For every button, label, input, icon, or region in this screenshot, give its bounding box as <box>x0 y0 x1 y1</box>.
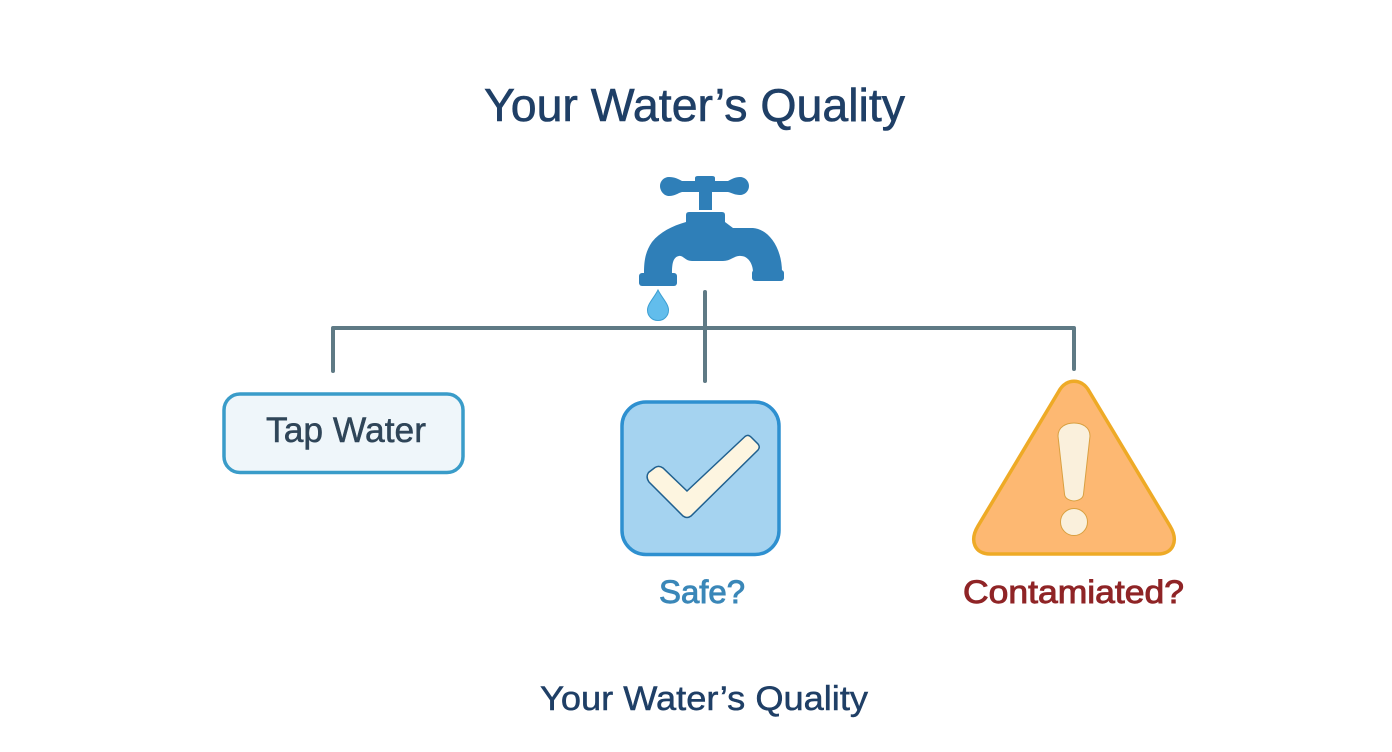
label: safe: Safe? <box>659 574 745 610</box>
icon: faucet <box>639 176 784 286</box>
title: Your Water’s Quality <box>484 79 905 131</box>
label: tap water: Tap Water <box>266 411 426 450</box>
panel: safe <box>622 402 779 610</box>
connector lines <box>333 292 1074 381</box>
panel: tap water box <box>224 394 463 472</box>
icon: check box <box>622 402 779 554</box>
footer caption: Your Water’s Quality <box>540 680 868 718</box>
icon: water drop <box>648 290 668 320</box>
panel: contaminated <box>963 381 1184 610</box>
label: contaminated: Contamiated? <box>963 574 1184 610</box>
icon: warning triangle <box>974 381 1174 554</box>
